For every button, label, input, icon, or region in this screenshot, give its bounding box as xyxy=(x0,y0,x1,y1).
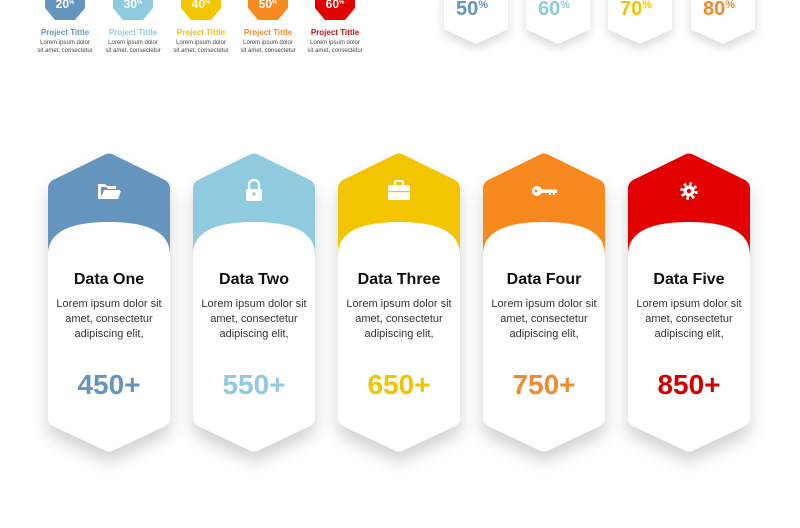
card: Data Four: Lorem ipsum dolor sit xyxy=(491,298,597,310)
card: Data Five: adipiscing elit, xyxy=(654,328,724,340)
icon: lock xyxy=(246,180,262,201)
card: Data Three: Data Three xyxy=(358,271,440,288)
icon: key xyxy=(532,186,557,196)
tag 70% xyxy=(608,0,672,44)
card: Data One: 450+ xyxy=(77,369,141,400)
card: Data Five: amet, consectetur xyxy=(645,313,733,325)
icon: gear xyxy=(682,184,696,198)
badge 60%: Project Tittle xyxy=(311,28,360,37)
card: Data One: adipiscing elit, xyxy=(74,328,144,340)
badge 50%: sit amet, consectetur xyxy=(240,48,296,54)
badge 30%: sit amet, consectetur xyxy=(105,48,161,54)
card: Data Two: adipiscing elit, xyxy=(219,328,289,340)
badge 20%: Project Tittle xyxy=(41,28,90,37)
card: Data One: amet, consectetur xyxy=(65,313,153,325)
top-right white hex percentage tags xyxy=(444,0,755,44)
badge 20% xyxy=(37,0,93,54)
card: Data Five: Data Five xyxy=(653,271,725,288)
card: Data Four: 750+ xyxy=(512,369,576,400)
card: Data One: Lorem ipsum dolor sit xyxy=(56,298,162,310)
card: Data Five: 850+ xyxy=(657,369,721,400)
badge 40%: Lorem ipsum dolor xyxy=(176,40,226,46)
card: Data Two: Lorem ipsum dolor sit xyxy=(201,298,307,310)
badge 50%: Lorem ipsum dolor xyxy=(243,40,293,46)
data cards xyxy=(48,154,750,452)
tag 80% xyxy=(691,0,755,44)
tag 50% xyxy=(444,0,508,44)
badge 30%: Project Tittle xyxy=(109,28,158,37)
card: Data Four xyxy=(483,154,605,452)
badge 60%: % xyxy=(339,0,345,6)
badge 40%: sit amet, consectetur xyxy=(173,48,229,54)
card: Data Two: 550+ xyxy=(222,369,286,400)
badge 50%: Project Tittle xyxy=(244,28,293,37)
badge 60%: Lorem ipsum dolor xyxy=(310,40,360,46)
card: Data Five: Lorem ipsum dolor sit xyxy=(636,298,742,310)
card: Data Five xyxy=(628,154,750,452)
badge 20%: % xyxy=(69,0,75,6)
icon: folder xyxy=(98,184,121,199)
card: Data Four: amet, consectetur xyxy=(500,313,588,325)
card: Data One: Data One xyxy=(74,271,144,288)
card: Data One xyxy=(48,154,170,452)
tag 60% xyxy=(526,0,590,44)
card: Data Three xyxy=(338,154,460,452)
badge 50% xyxy=(240,0,296,54)
badge 30% xyxy=(105,0,161,54)
card: Data Three: Lorem ipsum dolor sit xyxy=(346,298,452,310)
badge 30%: % xyxy=(137,0,143,6)
card: Data Two: amet, consectetur xyxy=(210,313,298,325)
card: Data Three: amet, consectetur xyxy=(355,313,443,325)
badge 40% xyxy=(173,0,229,54)
badge 50%: % xyxy=(272,0,278,6)
card: Data Four: Data Four xyxy=(507,271,581,288)
badge 30%: Lorem ipsum dolor xyxy=(108,40,158,46)
card: Data Two: Data Two xyxy=(219,271,289,288)
badge 60% xyxy=(307,0,363,54)
icon: briefcase xyxy=(388,181,410,200)
card: Data Three: 650+ xyxy=(367,369,431,400)
top-left small hex badges xyxy=(37,0,363,54)
badge 20%: sit amet, consectetur xyxy=(37,48,93,54)
card: Data Four: adipiscing elit, xyxy=(509,328,579,340)
badge 20%: Lorem ipsum dolor xyxy=(40,40,90,46)
badge 40%: % xyxy=(205,0,211,6)
card: Data Two xyxy=(193,154,315,452)
badge 60%: sit amet, consectetur xyxy=(307,48,363,54)
badge 40%: Project Tittle xyxy=(177,28,226,37)
card: Data Three: adipiscing elit, xyxy=(364,328,434,340)
